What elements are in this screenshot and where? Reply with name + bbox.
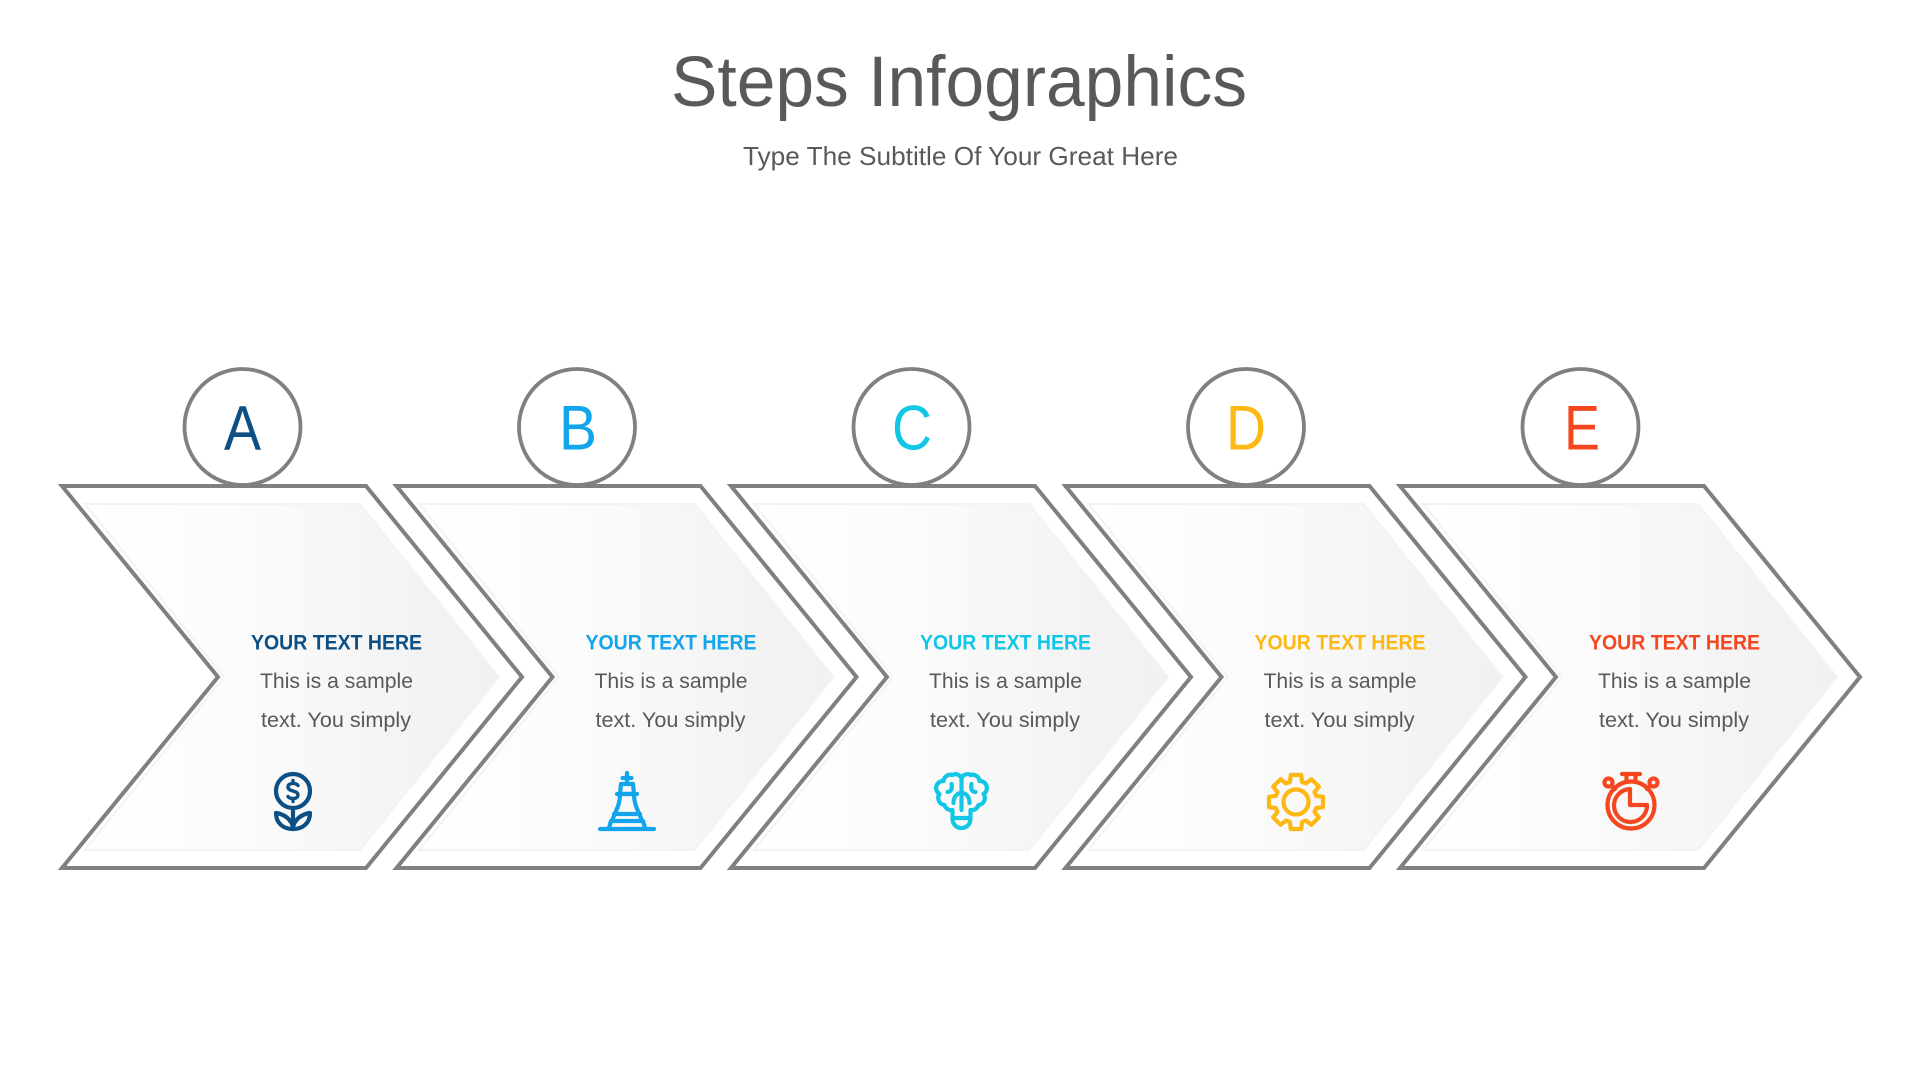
letter circle B (519, 369, 635, 485)
heading B: YOUR TEXT HERE (586, 632, 756, 654)
heading A: YOUR TEXT HERE (251, 632, 422, 654)
letter circle C: C (892, 394, 932, 464)
subtitle: Type The Subtitle Of Your Great Here (743, 141, 1178, 171)
panel: step A (62, 369, 522, 868)
title: Steps Infographics (671, 43, 1247, 122)
chevron fill B (420, 504, 834, 850)
body text B: text. You simply (596, 709, 746, 732)
letter circle D: D (1226, 394, 1266, 464)
chevron outline C (731, 486, 1191, 868)
body text B (594, 670, 748, 732)
letter circle E (1522, 369, 1638, 485)
body text D: This is a sample (1264, 670, 1416, 693)
body text A: This is a sample (260, 670, 413, 693)
icon: gear (1269, 775, 1323, 829)
body text C: This is a sample (929, 670, 1082, 693)
panel: step C (731, 369, 1191, 868)
panel: step E (1400, 369, 1860, 868)
body text B: This is a sample (594, 670, 748, 693)
body text C: text. You simply (930, 709, 1081, 732)
icon: chess king (600, 773, 654, 829)
body text E: text. You simply (1599, 709, 1750, 732)
letter circle C (854, 369, 970, 485)
chevron outline E (1400, 486, 1860, 868)
chevron outline D (1066, 486, 1526, 868)
heading E: YOUR TEXT HERE (1589, 632, 1760, 654)
chevron fill A (85, 504, 499, 850)
letter circle A: A (224, 394, 261, 464)
body text E (1598, 670, 1751, 732)
letter circle B: B (559, 394, 597, 464)
heading D: YOUR TEXT HERE (1254, 632, 1426, 654)
body text D (1264, 670, 1416, 732)
panel: step D (1066, 369, 1526, 868)
heading C: YOUR TEXT HERE (920, 632, 1091, 654)
chevron fill E (1423, 504, 1837, 850)
letter circle A (184, 369, 300, 485)
icon: brain bulb (936, 774, 987, 828)
body text A (260, 670, 413, 732)
body text D: text. You simply (1264, 709, 1415, 732)
icon: stopwatch (1604, 774, 1658, 828)
letter circle E: E (1564, 394, 1600, 464)
icon: money flower (276, 774, 310, 829)
chevron fill C (754, 504, 1168, 850)
chevron outline A (62, 486, 522, 868)
chevron outline B (396, 486, 856, 868)
chevron fill D (1088, 504, 1502, 850)
letter circle D (1188, 369, 1304, 485)
body text A: text. You simply (261, 709, 412, 732)
body text C (929, 670, 1082, 732)
body text E: This is a sample (1598, 670, 1751, 693)
panel: step B (396, 369, 856, 868)
